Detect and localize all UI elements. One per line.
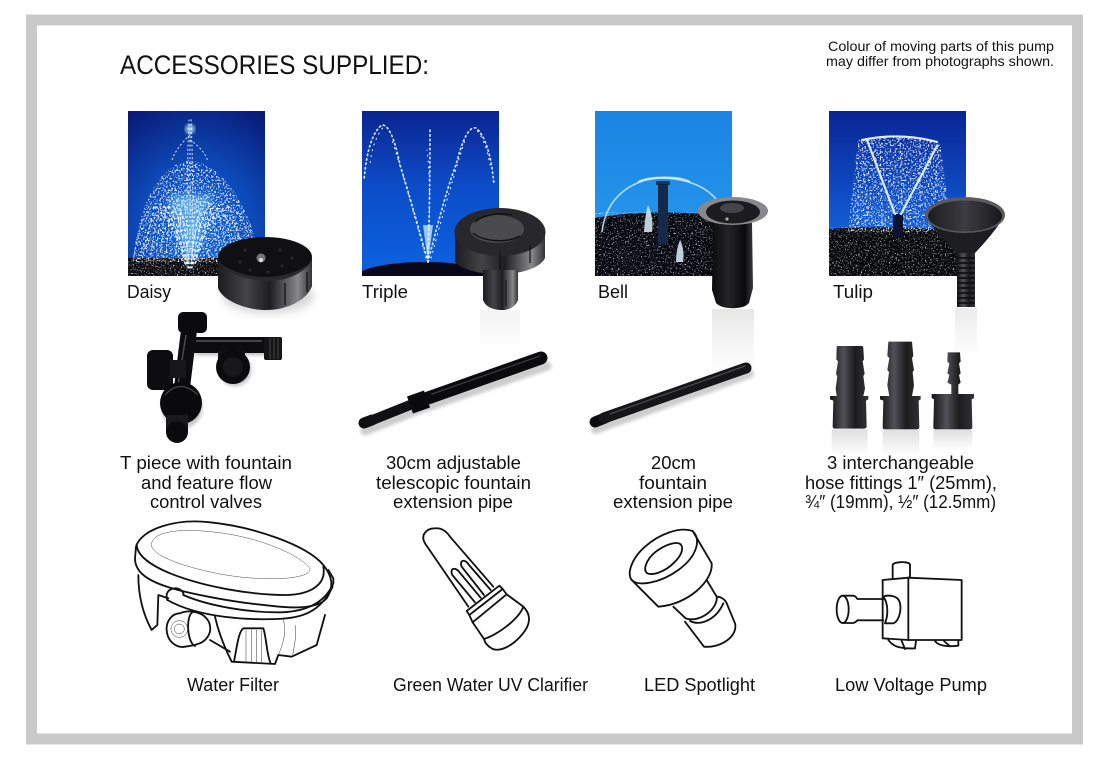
icon: water filter	[135, 521, 333, 664]
panel: Triple nozzle	[362, 111, 546, 320]
product: telescopic pipe	[364, 356, 547, 431]
label: T piece: and feature flow	[141, 473, 273, 493]
label: LED Spotlight: LED Spotlight	[644, 675, 755, 695]
label: 20cm pipe: extension pipe	[613, 492, 733, 512]
panel: Low Voltage Pump	[835, 562, 987, 695]
label: hose fittings: ¾″ (19mm), ½″ (12.5mm)	[805, 492, 996, 512]
panel: LED Spotlight	[630, 530, 755, 695]
product: Bell nozzle	[698, 197, 768, 371]
label: T piece: T piece with fountain	[120, 453, 292, 473]
label: 20cm pipe	[613, 453, 733, 512]
label: 20cm pipe: fountain	[639, 473, 707, 493]
label: 30cm pipe: 30cm adjustable	[386, 453, 521, 473]
label: 30cm pipe: extension pipe	[393, 492, 513, 512]
panel: UV Clarifier	[393, 528, 588, 695]
note: colour disclaimer: may differ from photographs shown.	[826, 53, 1054, 69]
label: hose fittings: hose fittings 1″ (25mm),	[805, 473, 997, 493]
product: 20cm pipe	[595, 366, 750, 430]
photo: Triple fountain	[362, 111, 499, 276]
label: Low Voltage Pump: Low Voltage Pump	[835, 675, 987, 695]
icon: pump	[837, 562, 962, 649]
label: T piece: control valves	[150, 492, 262, 512]
panel: Daisy nozzle	[127, 111, 314, 314]
title: ACCESSORIES SUPPLIED:	[120, 50, 429, 80]
product: Daisy nozzle	[218, 237, 314, 314]
label: Bell: Bell	[598, 282, 628, 302]
note: colour disclaimer	[826, 38, 1054, 69]
label: 30cm pipe: telescopic fountain	[376, 473, 531, 493]
label: hose fittings: 3 interchangeable	[827, 453, 974, 473]
label: hose fittings	[805, 453, 997, 512]
label: Triple: Triple	[362, 282, 408, 302]
panel: Water Filter	[135, 521, 333, 695]
product: Tulip nozzle	[925, 197, 1005, 358]
product: Triple nozzle	[454, 208, 546, 350]
note: colour disclaimer: Colour of moving parts of this pump	[828, 38, 1054, 54]
product: T piece	[147, 312, 282, 443]
panel: 20cm pipe	[595, 366, 750, 512]
label: Water Filter: Water Filter	[187, 675, 279, 695]
icon: LED spotlight	[630, 530, 735, 647]
label: T piece	[120, 453, 292, 512]
panel: Bell nozzle	[595, 111, 768, 371]
icon: UV clarifier	[423, 528, 529, 650]
label: UV Clarifier: Green Water UV Clarifier	[393, 675, 588, 695]
label: 20cm pipe: 20cm	[651, 453, 696, 473]
panel: Tulip nozzle	[829, 111, 1005, 358]
photo: Bell fountain	[595, 111, 732, 276]
label: Tulip: Tulip	[833, 282, 873, 302]
label: 30cm pipe	[376, 453, 531, 512]
product: hose fittings	[830, 342, 974, 457]
label: Daisy: Daisy	[127, 282, 171, 302]
panel: T piece	[120, 312, 292, 512]
panel: 30cm telescopic pipe	[364, 356, 547, 512]
photo: Daisy fountain	[128, 111, 265, 276]
photo: Tulip fountain	[829, 111, 966, 276]
panel: hose fittings	[805, 342, 997, 512]
